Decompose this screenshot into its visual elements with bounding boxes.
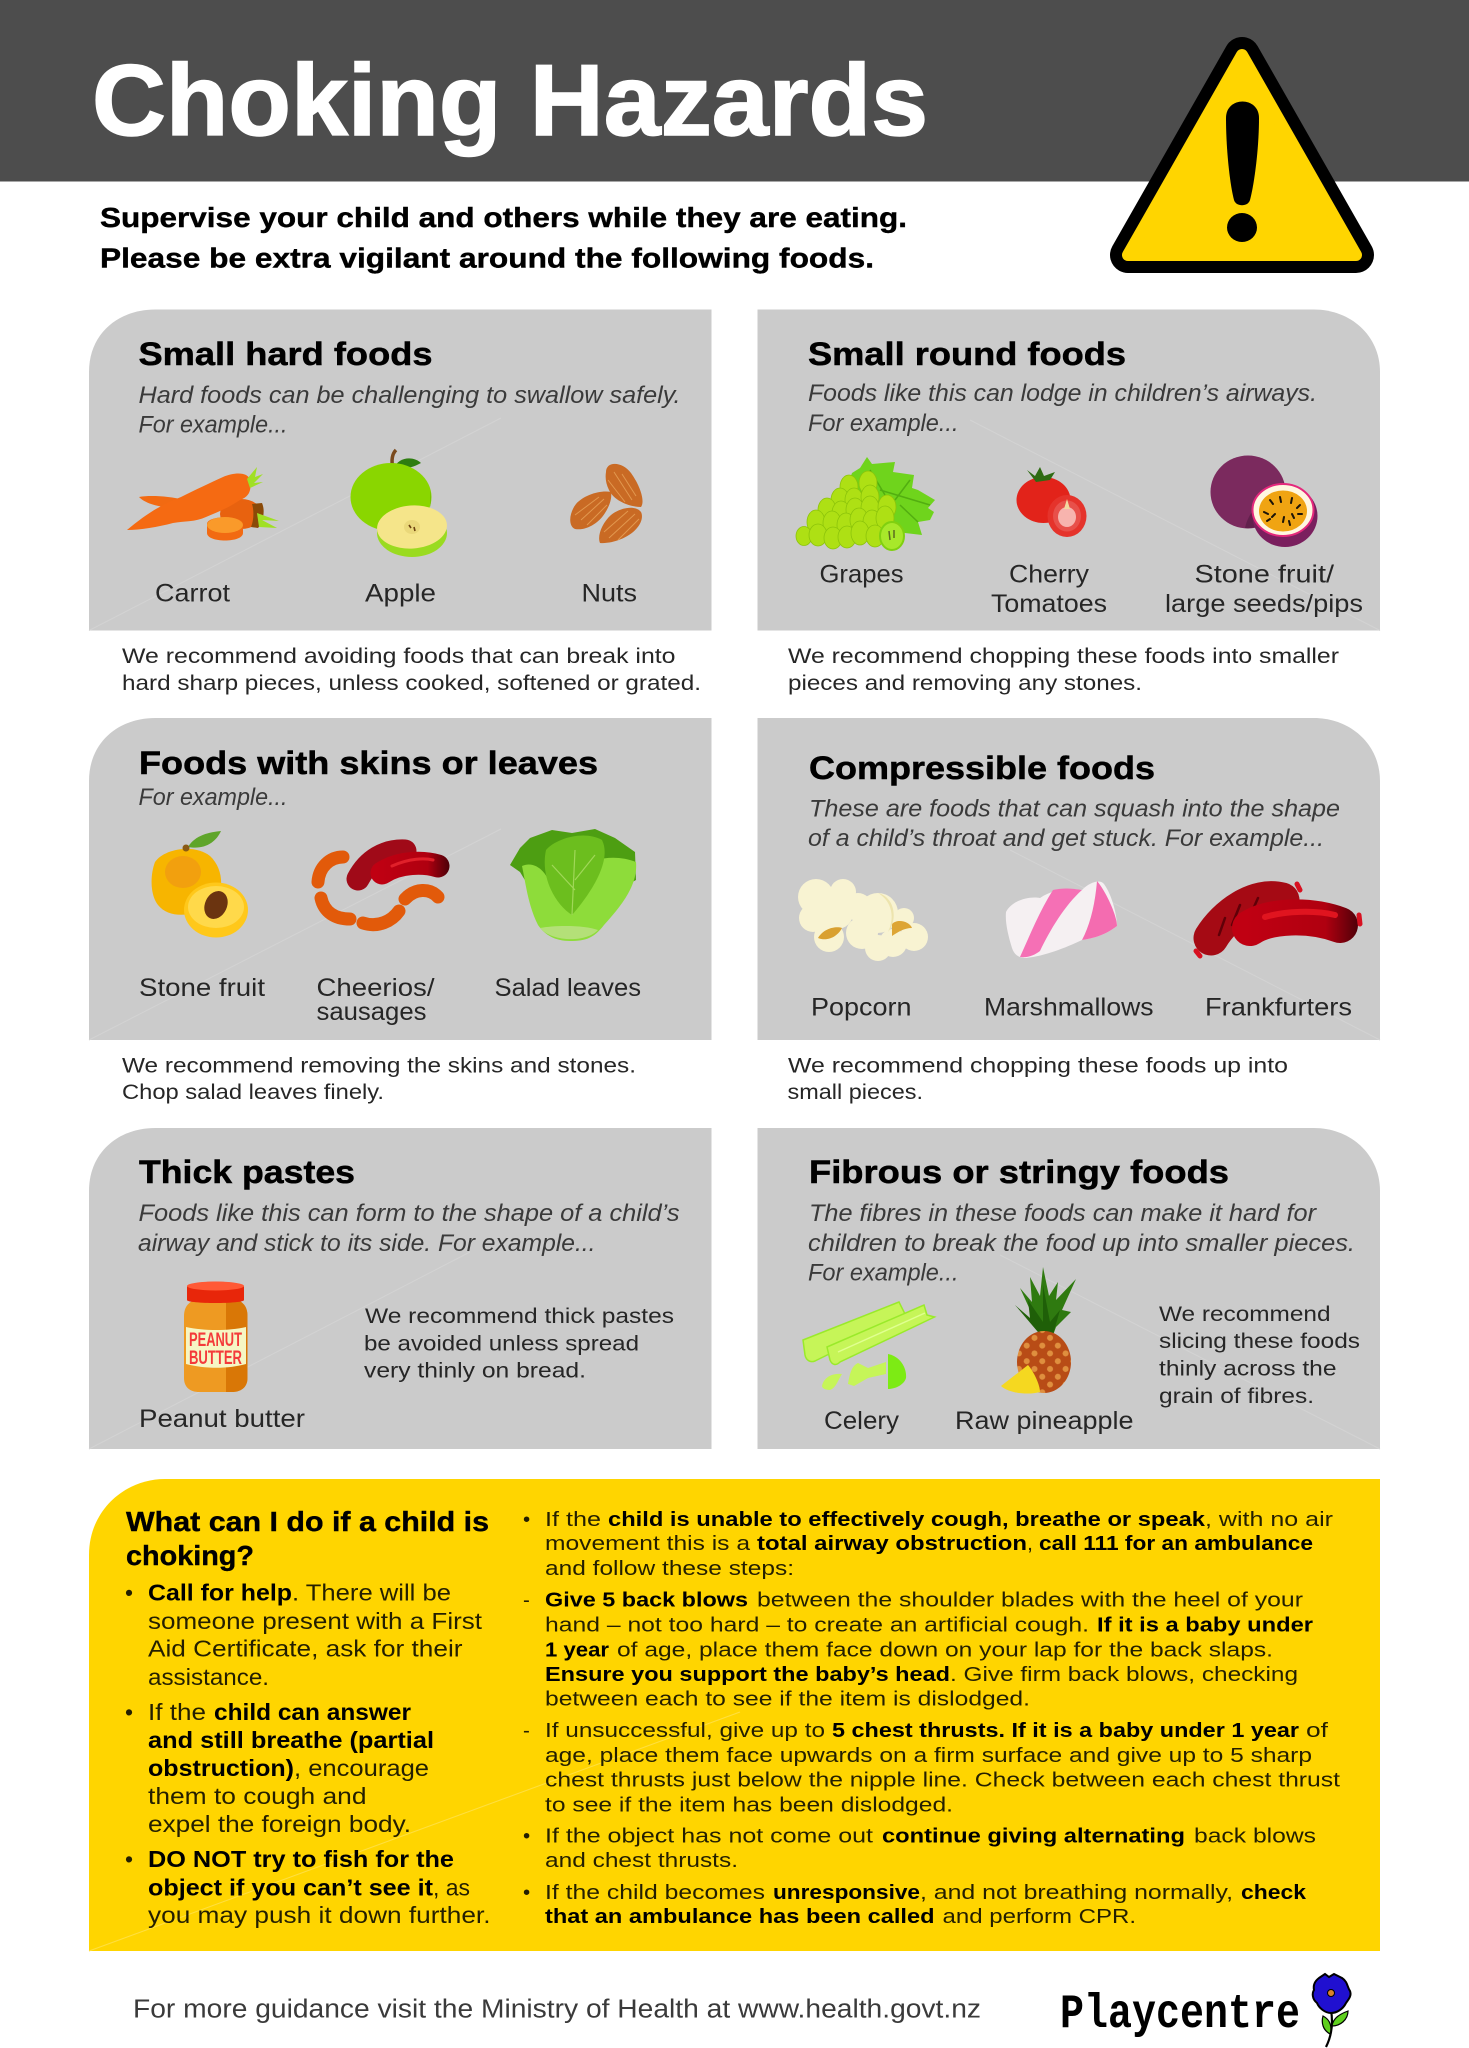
label: salad leaves: Salad leaves (494, 974, 641, 1002)
heading: Fibrous or stringy foods (809, 1154, 1229, 1190)
label: peanut butter: Peanut butter (139, 1405, 305, 1433)
label text: peanut butter: PEANUT (189, 1330, 242, 1351)
first aid advice: right column (523, 1508, 1340, 1928)
first aid advice: right column: and chest thrusts. (545, 1849, 738, 1872)
first aid advice: right column: child is unable to effectively cough, breathe or speak (608, 1508, 1206, 1531)
panel: foods with skins or leaves (89, 718, 712, 1040)
recommendation: fibrous foods: thinly across the (1159, 1356, 1336, 1380)
description: of a child’s throat and get stuck. For example... (808, 825, 1324, 852)
description: For example... (808, 410, 958, 437)
label: raw pineapple: Raw pineapple (955, 1407, 1134, 1435)
first aid advice: right column: check (1241, 1881, 1307, 1904)
icon: salad leaves (510, 829, 636, 941)
first aid advice: left column: , as (433, 1874, 470, 1900)
icon: warning triangle (1128, 55, 1356, 255)
label: cheerios, sausages: Cheerios/ (316, 974, 435, 1002)
first aid advice: right column: If it is a baby under (1097, 1614, 1313, 1636)
recommendation: compressible foods: We recommend chopping these foods up into (788, 1054, 1288, 1078)
recommendation: skins or leaves: We recommend removing the skins and stones. (122, 1054, 636, 1078)
first aid advice: left column: If the (148, 1699, 206, 1725)
first aid advice: left column: child can answer (214, 1699, 411, 1725)
first aid advice: left column: obstruction) (148, 1755, 294, 1781)
heading: Foods with skins or leaves (139, 745, 598, 781)
panel: thick pastes (89, 1128, 712, 1449)
icon: passion fruit (1210, 456, 1318, 547)
first aid advice: left column: , encourage (294, 1755, 429, 1781)
icon: carrot (127, 467, 279, 540)
first aid advice: left column: • (125, 1699, 133, 1725)
first aid advice: left column: you may push it down further. (148, 1902, 490, 1928)
description (808, 380, 1317, 437)
recommendation: small round foods: pieces and removing any stones. (788, 671, 1142, 695)
heading: What can I do if a child is (126, 1506, 489, 1537)
recommendation: small hard foods: We recommend avoiding foods that can break into (122, 644, 676, 668)
description: For example... (138, 412, 288, 438)
description: Foods like this can lodge in children’s airways. (808, 380, 1317, 407)
first aid advice: left column: them to cough and (148, 1783, 366, 1809)
icon: flower (1313, 1974, 1351, 2047)
first aid advice: right column: of (1306, 1719, 1328, 1742)
intro text: Supervise your child and others while they are eating. (100, 202, 907, 233)
label: cheerios, sausages (316, 974, 435, 1026)
first aid advice: right column: of age, place them face down on your lap for the back slaps. (617, 1638, 1273, 1662)
first aid advice: right column: and perform CPR. (942, 1905, 1136, 1928)
first aid advice: right column: back blows (1194, 1824, 1316, 1848)
first aid advice: right column: between the shoulder blades with the heel of your (757, 1588, 1303, 1612)
description: The fibres in these foods can make it hard for (809, 1200, 1317, 1227)
recommendation: small hard foods: hard sharp pieces, unless cooked, softened or grated. (122, 671, 701, 695)
label: stone fruit, large seeds: large seeds/pips (1165, 590, 1363, 618)
heading (126, 1506, 489, 1571)
first aid advice: right column: age, place them face upwards on a firm surface and give up to 5 sharp (545, 1744, 1312, 1767)
panel: small hard foods (89, 310, 712, 630)
recommendation: thick pastes: very thinly on bread. (364, 1358, 586, 1382)
first aid advice: right column: 1 year (545, 1638, 609, 1662)
icon: celery (803, 1302, 934, 1390)
first aid advice: left column: . There will be (292, 1580, 451, 1606)
description: These are foods that can squash into the shape (809, 796, 1340, 822)
first aid advice: right column: and follow these steps: (545, 1557, 794, 1580)
first aid advice: right column: hand – not too hard – to create an artificial cough. (545, 1614, 1089, 1636)
first aid advice: left column: DO NOT try to fish for the (148, 1846, 454, 1872)
label: stone fruit: Stone fruit (139, 974, 265, 1002)
description: For example... (808, 1260, 958, 1286)
recommendation: small round foods (788, 644, 1339, 695)
icon: peanut butter jar (184, 1282, 248, 1392)
label: cherry tomatoes: Cherry (1009, 560, 1090, 588)
label: stone fruit, large seeds (1165, 560, 1363, 618)
first aid advice: right column: . Give firm back blows, checking (950, 1663, 1298, 1686)
heading: Thick pastes (139, 1154, 355, 1190)
description: children to break the food up into smaller pieces. (808, 1230, 1355, 1257)
description: airway and stick to its side. For example... (138, 1230, 596, 1257)
description: Hard foods can be challenging to swallow safely. (138, 382, 680, 409)
icon: cherry tomatoes (1016, 467, 1086, 537)
first aid advice: left column: and still breathe (partial (148, 1727, 434, 1753)
first aid advice: right column: movement this is a (545, 1532, 751, 1555)
label: carrot: Carrot (155, 580, 230, 608)
first aid advice: right column: to see if the item has been dislodged. (545, 1794, 953, 1816)
label text: peanut butter (189, 1330, 242, 1369)
label: marshmallows: Marshmallows (984, 994, 1154, 1022)
first aid advice: right column: , and not breathing normally, (920, 1881, 1233, 1904)
label: celery: Celery (824, 1407, 900, 1435)
panel: small round foods (758, 310, 1380, 630)
label: popcorn: Popcorn (811, 994, 912, 1022)
first aid advice: left column: assistance. (148, 1664, 269, 1690)
icon: nuts (570, 464, 643, 543)
first aid advice: right column: If the (545, 1508, 601, 1531)
label: nuts: Nuts (582, 580, 637, 608)
recommendation: small round foods: We recommend chopping these foods into smaller (788, 644, 1339, 668)
heading: Small round foods (808, 336, 1126, 372)
panel: compressible foods (758, 718, 1380, 1040)
icon: stone fruit (152, 831, 248, 938)
first aid advice: right column: If the child becomes (545, 1881, 765, 1904)
icon: popcorn (798, 879, 928, 961)
icon: apple (350, 450, 448, 557)
recommendation: skins or leaves: Chop salad leaves finely. (122, 1080, 384, 1104)
label: frankfurters: Frankfurters (1205, 994, 1352, 1022)
heading: Small hard foods (138, 336, 432, 372)
recommendation: compressible foods (788, 1054, 1288, 1104)
first aid advice: left column: expel the foreign body. (148, 1811, 411, 1837)
label: cherry tomatoes: Tomatoes (991, 590, 1107, 618)
first aid advice: right column: continue giving alternating (882, 1824, 1185, 1848)
first aid advice: right column: call 111 for an ambulance (1039, 1532, 1313, 1555)
intro text (100, 202, 907, 274)
panel: what can I do if a child is choking (89, 1479, 1380, 1951)
label: stone fruit, large seeds: Stone fruit/ (1194, 560, 1334, 588)
description (808, 796, 1340, 852)
first aid advice: right column: • (523, 1881, 530, 1904)
first aid advice: right column: , (1027, 1532, 1033, 1555)
description (138, 382, 680, 438)
first aid advice: right column: total airway obstruction (757, 1532, 1027, 1555)
icon: frankfurters (1196, 884, 1360, 956)
icon: grapes (796, 457, 935, 550)
first aid advice: right column: - (523, 1588, 530, 1612)
label text: peanut butter: BUTTER (189, 1348, 242, 1369)
first aid advice: right column: chest thrusts just below the nipple line. Check between each chest thrust (545, 1768, 1340, 1792)
label: cherry tomatoes (991, 560, 1107, 618)
recommendation: thick pastes (364, 1304, 674, 1382)
label: apple: Apple (365, 580, 436, 608)
first aid advice: left column: Aid Certificate, ask for their (148, 1636, 463, 1662)
first aid advice: right column: 5 chest thrusts. If it is a baby under 1 year (832, 1719, 1299, 1742)
description (138, 1200, 680, 1257)
recommendation: thick pastes: be avoided unless spread (364, 1332, 639, 1356)
first aid advice: left column: Call for help (148, 1580, 292, 1606)
first aid advice: left column: • (125, 1580, 133, 1606)
first aid advice: left column: someone present with a First (148, 1608, 483, 1634)
first aid advice: right column: If the object has not come out (545, 1824, 873, 1848)
recommendation: fibrous foods: We recommend (1159, 1302, 1330, 1326)
recommendation: compressible foods: small pieces. (788, 1080, 923, 1104)
first aid advice: right column: between each to see if the item is dislodged. (545, 1688, 1030, 1710)
recommendation: small hard foods (122, 644, 701, 695)
first aid advice: right column: , with no air (1205, 1508, 1333, 1531)
intro text: Please be extra vigilant around the following foods. (100, 242, 874, 274)
recommendation: skins or leaves (122, 1054, 636, 1104)
first aid advice: left column: • (125, 1846, 133, 1872)
icon: marshmallow (1006, 881, 1117, 958)
description: For example... (138, 784, 288, 811)
first aid advice: right column: Give 5 back blows (545, 1588, 748, 1612)
recommendation: fibrous foods: grain of fibres. (1159, 1384, 1314, 1408)
first aid advice: right column: that an ambulance has been called (545, 1905, 934, 1928)
first aid advice: right column: • (523, 1508, 530, 1531)
header band (0, 0, 1469, 182)
first aid advice: left column (125, 1580, 490, 1928)
heading: choking? (126, 1540, 254, 1571)
heading: Compressible foods (809, 750, 1155, 786)
recommendation: fibrous foods: slicing these foods (1159, 1329, 1360, 1353)
first aid advice: right column: Ensure you support the baby’s head (545, 1663, 950, 1686)
logo: Playcentre: Playcentre (1060, 1988, 1300, 2042)
recommendation: fibrous foods (1159, 1302, 1360, 1408)
footer guidance text: For more guidance visit the Ministry of Health at www.health.govt.nz (133, 1996, 981, 2024)
icon: cheerios and sausages (318, 851, 438, 925)
label: cheerios, sausages: sausages (316, 998, 426, 1026)
first aid advice: right column: If unsuccessful, give up to (545, 1719, 825, 1742)
panel: fibrous or stringy foods (758, 1128, 1380, 1449)
icon: pineapple (1001, 1267, 1076, 1394)
description: Foods like this can form to the shape of a child’s (138, 1200, 680, 1227)
description (808, 1200, 1355, 1286)
label: grapes: Grapes (820, 560, 904, 588)
recommendation: thick pastes: We recommend thick pastes (365, 1304, 674, 1328)
first aid advice: right column: • (523, 1824, 530, 1848)
title: Choking Hazards (92, 45, 928, 157)
first aid advice: right column: - (523, 1719, 530, 1742)
first aid advice: left column: object if you can’t see it (148, 1874, 433, 1900)
first aid advice: right column: unresponsive (773, 1881, 920, 1904)
